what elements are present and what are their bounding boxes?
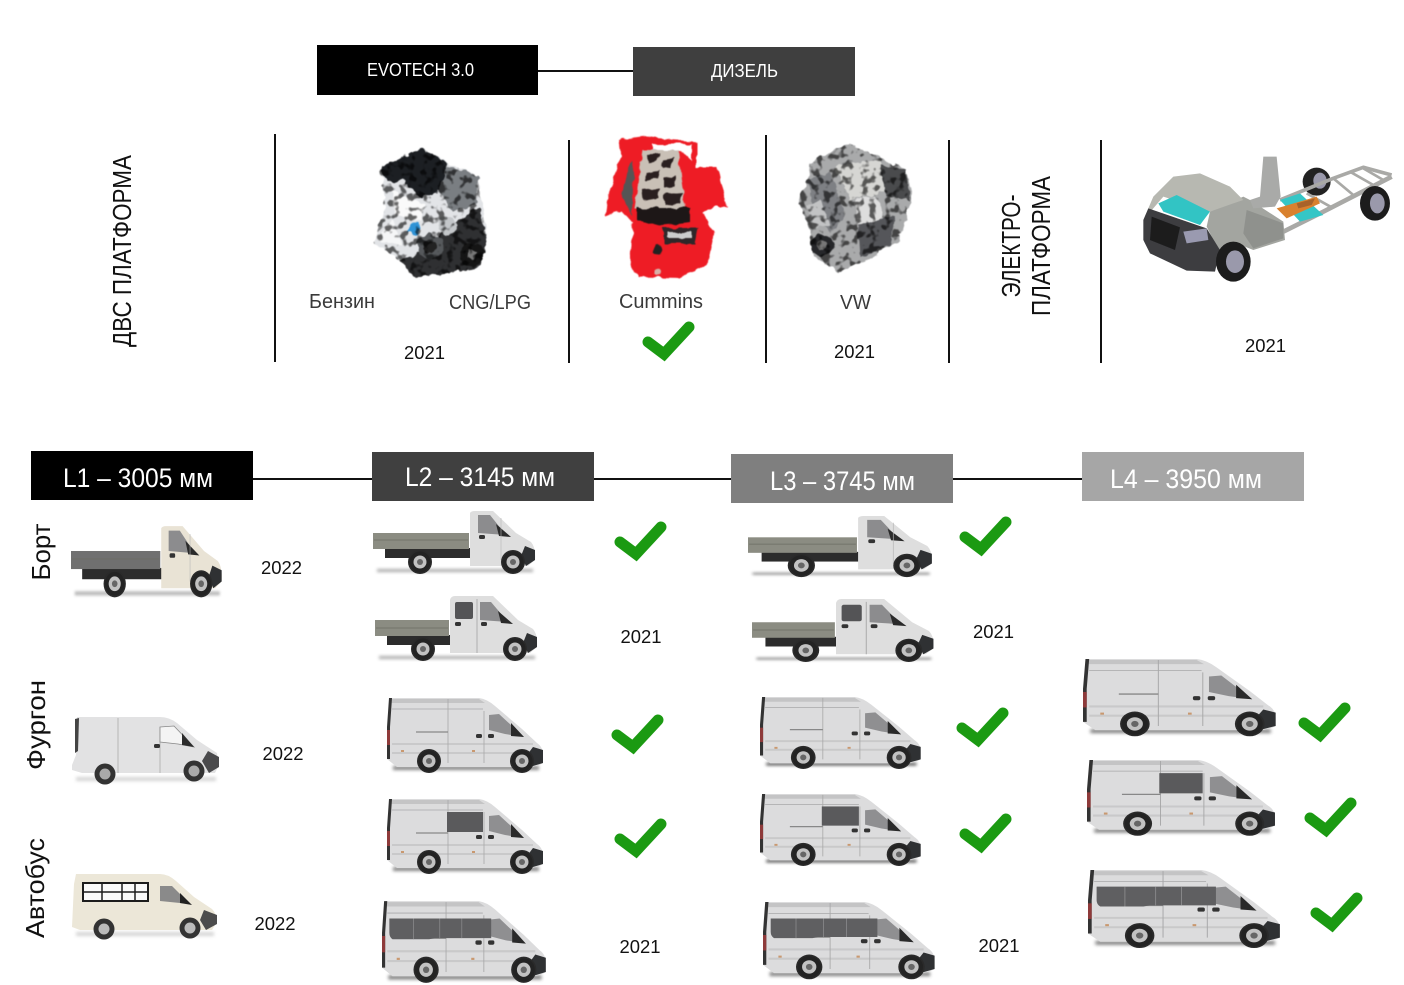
icon: red Cummins engine xyxy=(605,137,728,278)
row label: flatbed: Борт xyxy=(26,523,56,580)
vehicle years: 2021 xyxy=(973,622,1014,642)
vehicle: L4 combi van xyxy=(1087,760,1275,836)
connector line: wheelbases xyxy=(253,478,1082,480)
engine labels: Cummins xyxy=(619,291,703,313)
engine labels: CNG/LPG xyxy=(449,292,531,314)
header: EVOTECH 3.0 xyxy=(317,45,538,95)
connector line: engines xyxy=(538,70,633,72)
engine labels xyxy=(309,291,871,314)
check marks: vehicles xyxy=(617,522,1357,925)
vehicle: L3 bus xyxy=(763,902,935,979)
vehicle years: 2021 xyxy=(620,937,660,957)
vehicle: L3 crew flatbed xyxy=(752,599,934,662)
vehicle: L2 van xyxy=(387,698,543,773)
vehicle: L2 bus xyxy=(382,901,546,983)
vehicle: L2 crew flatbed xyxy=(375,596,537,661)
icon: electric chassis xyxy=(1143,157,1392,282)
engine years xyxy=(404,336,1286,363)
engine labels: VW xyxy=(840,292,871,314)
vehicle years: 2021 xyxy=(620,627,662,647)
icon: gasoline engine xyxy=(374,148,487,277)
wheelbase header: L1: L1 – 3005 мм xyxy=(63,463,213,493)
far rear wheel xyxy=(1303,168,1331,196)
row label: bus: Автобус xyxy=(20,838,50,938)
front wheel xyxy=(1216,242,1251,282)
vehicle: L2 combi van xyxy=(387,799,543,874)
vehicle: L1 bus xyxy=(72,874,217,940)
vertical label: electric platform: ПЛАТФОРМА xyxy=(1026,175,1056,316)
wheelbase header: L3: L3 – 3745 мм xyxy=(770,466,915,496)
vehicle: L1 flatbed xyxy=(71,526,222,597)
icon: VW engine xyxy=(799,143,912,272)
check: Cummins xyxy=(648,327,689,354)
wheelbase header: L3 xyxy=(731,454,953,503)
vehicle: L4 bus xyxy=(1088,870,1280,948)
wheelbase header: L1 xyxy=(31,451,253,500)
vehicle: L2 flatbed xyxy=(373,511,535,574)
vertical label: ICE platform: ДВС ПЛАТФОРМА xyxy=(107,154,137,347)
vertical label: electric platform: ЭЛЕКТРО- xyxy=(996,194,1026,298)
vehicle: L4 van xyxy=(1083,659,1276,736)
vehicle years: 2021 xyxy=(978,936,1020,956)
header: EVOTECH 3.0: EVOTECH 3.0 xyxy=(367,60,474,80)
vehicle years: 2022 xyxy=(261,558,302,578)
vertical label: electric platform xyxy=(996,175,1056,316)
header: diesel xyxy=(633,47,855,96)
engine labels: Бензин xyxy=(309,291,375,313)
wheelbase header: L2: L2 – 3145 мм xyxy=(405,462,555,492)
engine years: 2021 xyxy=(404,343,445,363)
frame rails xyxy=(1280,167,1392,232)
wheelbase header: L2 xyxy=(372,452,594,501)
wheelbase header: L4 xyxy=(1082,452,1304,501)
column dividers xyxy=(275,134,1101,363)
near rear wheel xyxy=(1360,186,1390,221)
row label: van: Фургон xyxy=(21,680,51,770)
vehicle: L3 flatbed xyxy=(748,516,932,577)
header: diesel: ДИЗЕЛЬ xyxy=(711,61,778,81)
vehicle years: 2022 xyxy=(254,914,296,934)
vehicle: L1 van xyxy=(72,717,219,784)
vehicle: L3 combi van xyxy=(760,794,921,866)
vehicle years xyxy=(254,558,1020,957)
vehicle years: 2022 xyxy=(262,744,304,764)
wheelbase header: L4: L4 – 3950 мм xyxy=(1110,464,1262,494)
vehicle: L3 van xyxy=(760,697,921,769)
engine years: 2021 xyxy=(1245,336,1286,356)
engine years: 2021 xyxy=(834,342,875,362)
